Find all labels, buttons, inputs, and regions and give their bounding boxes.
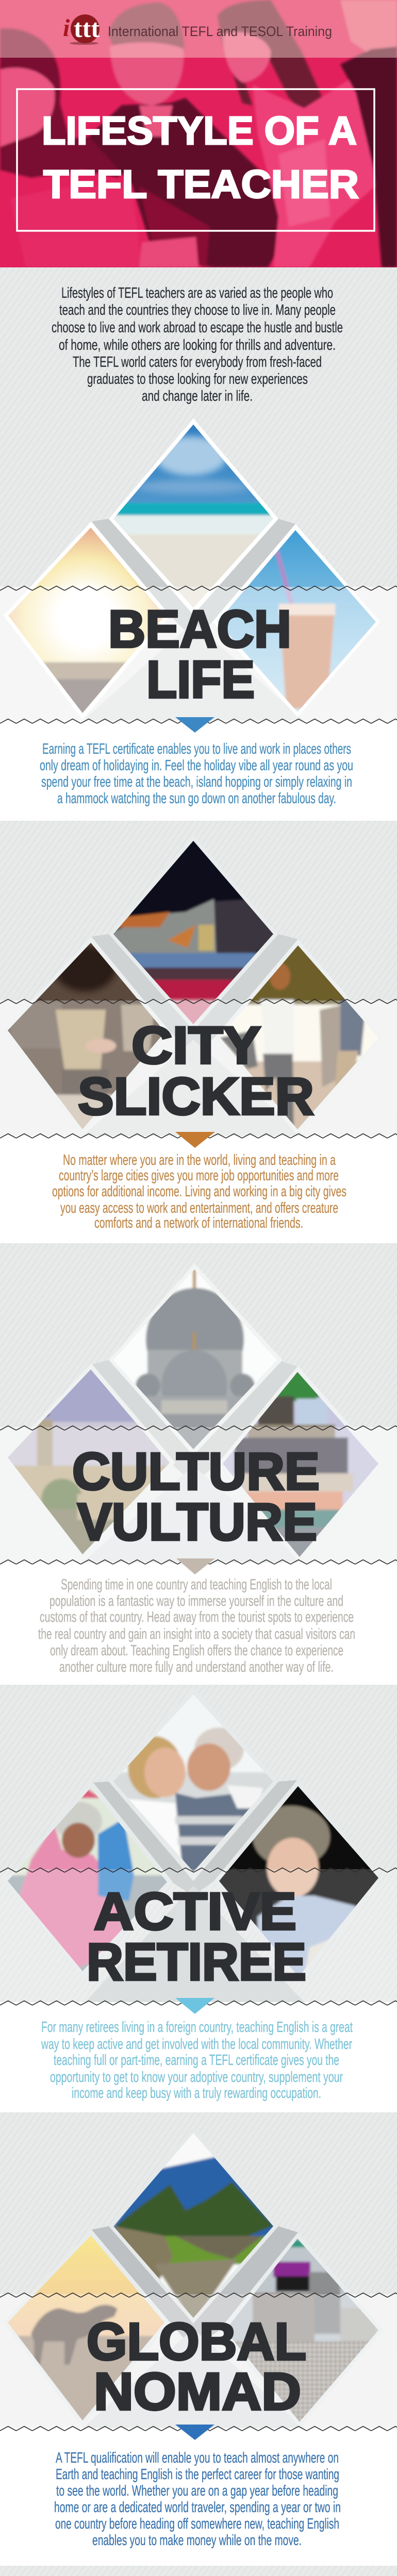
- photo: mosque domes: [113, 1269, 276, 1449]
- heading: [87, 2312, 306, 2421]
- photo: mountain ruins: [113, 2133, 273, 2318]
- band overlay: [0, 1869, 397, 2002]
- heading: GLOBAL: [87, 2312, 306, 2371]
- pointer: [175, 2425, 214, 2440]
- text block: [38, 1577, 355, 1675]
- pointer: [176, 1558, 215, 1574]
- title: LIFESTYLE OF A: [42, 109, 357, 153]
- text block: [52, 1152, 346, 1231]
- zigzag edges: [0, 585, 397, 724]
- heading: CITY: [131, 1016, 261, 1075]
- photo: busy city crossing: [230, 2239, 378, 2422]
- zigzag edges: [0, 1867, 397, 2006]
- photo: iced drink by the sea: [218, 530, 376, 712]
- logo: ittt globe: ttt: [74, 14, 100, 43]
- zigzag edges: [0, 2292, 397, 2432]
- title frame: [17, 89, 374, 231]
- band overlay: [0, 1427, 397, 1563]
- photo: hilltop town: [8, 1369, 170, 1554]
- logo: ittt globe: i: [63, 14, 70, 42]
- photo: friends toasting drinks: [8, 943, 161, 1129]
- pointer: [175, 1998, 214, 2014]
- heading: NOMAD: [94, 2362, 301, 2421]
- photo: city waterfront at night: [113, 841, 273, 1024]
- text block: [40, 741, 353, 807]
- photo: street market: [223, 1372, 378, 1557]
- band overlay: [0, 2294, 397, 2428]
- photo: smiling woman with glasses: [219, 1786, 378, 1973]
- band overlay: [0, 587, 397, 721]
- zigzag edges: [0, 998, 397, 1139]
- lighter top strip: [0, 0, 397, 58]
- band overlay: [0, 1001, 397, 1136]
- heading: [78, 1016, 314, 1126]
- heading: BEACH: [108, 600, 291, 658]
- zigzag edges: [0, 1425, 397, 1565]
- heading: VULTURE: [77, 1493, 317, 1551]
- white text strip with pointer: [175, 717, 214, 733]
- intro text: graduates to those looking for new experiences: [87, 371, 308, 387]
- text block: [54, 2450, 341, 2549]
- text block: [41, 2019, 353, 2102]
- heading: CULTURE: [72, 1442, 320, 1501]
- photo: sunset: [8, 528, 163, 713]
- photo: four smiling teachers: [0, 0, 397, 267]
- panel: active retiree: [0, 1685, 397, 2102]
- photo: woman exercising: [8, 1788, 167, 1971]
- intro text: and change later in life.: [142, 388, 253, 404]
- panel: city slicker: [0, 821, 397, 1231]
- title: TEFL TEACHER: [43, 162, 359, 207]
- pointer: [175, 1132, 215, 1148]
- heading: LIFE: [146, 650, 255, 709]
- heading: [87, 1882, 306, 1991]
- intro text: [52, 285, 343, 404]
- photo: beach and sea: [113, 425, 273, 608]
- panel: global nomad: [0, 2112, 397, 2549]
- heading: SLICKER: [78, 1067, 314, 1126]
- panel: beach life: [0, 417, 397, 807]
- logo: ittt globe: [63, 14, 100, 45]
- striped background: intro and beach top: [0, 267, 397, 587]
- heading: [72, 1442, 320, 1551]
- header panel with teachers photo: [0, 0, 397, 267]
- text block: comforts and a network of international friends.: [94, 1215, 303, 1231]
- heading: ACTIVE: [94, 1882, 296, 1941]
- logo wordmark: International TEFL and TESOL Training: [108, 24, 332, 39]
- panel: culture vulture: [0, 1243, 397, 1675]
- photo: camel at sunset: [8, 2235, 164, 2420]
- striped footer: [0, 2566, 397, 2576]
- heading: RETIREE: [87, 1933, 306, 1991]
- photo: laughing couple: [113, 1695, 273, 1872]
- photo: people walking in a city: [220, 945, 378, 1129]
- title: [43, 115, 360, 199]
- heading: [108, 600, 291, 709]
